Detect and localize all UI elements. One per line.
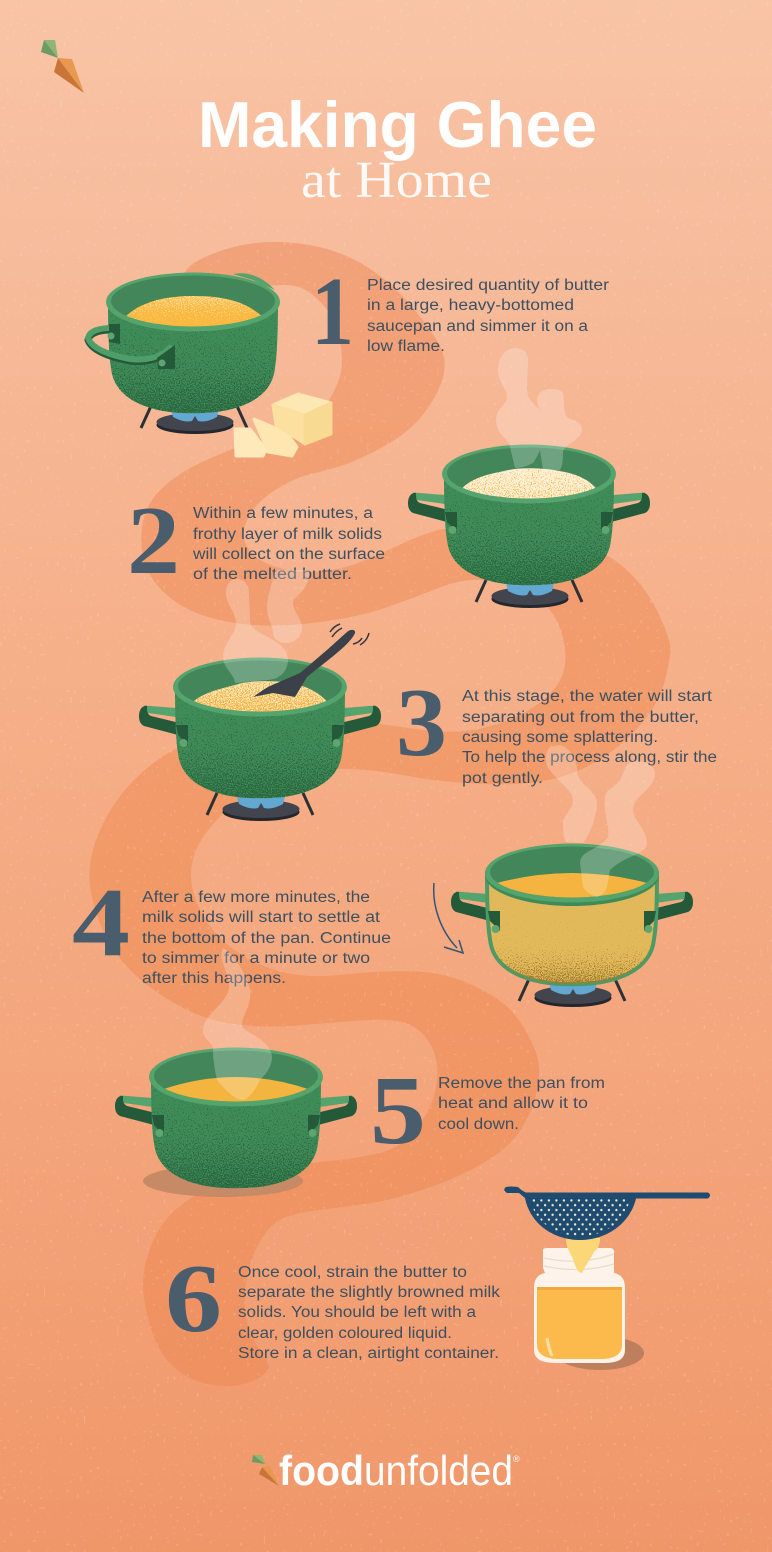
step 5 text: cool down. (438, 1116, 519, 1133)
step 1 text: saucepan and simmer it on a (367, 318, 588, 335)
frothy milk solids (462, 468, 596, 498)
step 4 text: the bottom of the pan. Continue (142, 930, 391, 947)
step 1 text (367, 277, 609, 355)
step 6 number: 6 (165, 1245, 222, 1352)
step 1 text: in a large, heavy-bottomed (367, 297, 574, 314)
melting butter in pot 1 (126, 296, 261, 326)
foodunfolded logo: food (279, 1447, 364, 1494)
title (198, 88, 597, 209)
steam over pot 5 (203, 948, 272, 1100)
spoon (253, 624, 369, 697)
title: at Home (301, 152, 492, 209)
step 3 text (462, 688, 717, 787)
step 6 text (238, 1264, 500, 1362)
step 6 text: Store in a clean, airtight container. (238, 1345, 499, 1362)
pot 5 off the heat (115, 1048, 357, 1197)
step 6 text: separate the slightly browned milk (238, 1284, 500, 1301)
step 5 text: heat and allow it to (438, 1095, 588, 1112)
jar of ghee (534, 1248, 644, 1370)
front handle of pot 1 (88, 324, 175, 369)
step 2 number: 2 (127, 487, 180, 594)
step 6 text: solids. You should be left with a (238, 1304, 476, 1321)
pot 2 (408, 444, 650, 608)
step 3 text: To help the process along, stir the (462, 749, 717, 766)
jar shadow (556, 1336, 644, 1370)
step 1 number: 1 (311, 258, 354, 365)
cooling butter (164, 1077, 307, 1102)
step 6 text: clear, golden coloured liquid. (238, 1325, 452, 1342)
step 6 text: Once cool, strain the butter to (238, 1264, 467, 1281)
step 3 text: separating out from the butter, (462, 709, 699, 726)
step 2 text: will collect on the surface (192, 546, 385, 563)
winding ribbon path (89, 242, 671, 1386)
pot shadow (143, 1165, 303, 1197)
step 4 text: milk solids will start to settle at (142, 909, 381, 926)
pot 4 with settled milk solids (451, 844, 693, 1007)
step 3 text: At this stage, the water will start (462, 688, 713, 705)
milk solids being stirred (194, 681, 326, 712)
step 1 text: low flame. (367, 338, 445, 355)
steam over pot 4 (546, 745, 655, 897)
pot 1 with butter (88, 272, 280, 434)
dripping ghee (566, 1238, 600, 1273)
step 2 text: frothy layer of milk solids (193, 526, 382, 543)
step 4 text: after this happens. (142, 970, 286, 987)
butter pieces (235, 394, 331, 456)
step 5 number: 5 (370, 1057, 426, 1164)
step 1 text: Place desired quantity of butter (367, 277, 609, 294)
title: Making Ghee (198, 88, 597, 161)
carrot icon (41, 40, 84, 93)
step 4 text: to simmer for a minute or two (142, 950, 370, 967)
step 2 text: Within a few minutes, a (193, 505, 373, 522)
step 3 number: 3 (396, 669, 447, 776)
step 3 text: causing some splattering. (462, 729, 658, 746)
step 2 text (192, 505, 385, 583)
steam over pot 3 (223, 570, 310, 683)
step 5 text (438, 1075, 605, 1133)
step 3 text: pot gently. (462, 770, 543, 787)
step 4 text: After a few more minutes, the (142, 889, 370, 906)
step 5 text: Remove the pan from (438, 1075, 605, 1092)
foodunfolded logo: ® (513, 1454, 520, 1464)
arrow: solids settling (434, 883, 463, 953)
foodunfolded logo (252, 1447, 520, 1494)
foodunfolded logo: unfolded (364, 1447, 513, 1494)
step 2 text: of the melted butter. (193, 566, 352, 583)
steam over pot 2 (496, 348, 582, 470)
step 4 text (142, 889, 391, 987)
liquid butter in pot 4 (498, 873, 646, 898)
pot 3 (139, 658, 381, 821)
strainer (504, 1186, 710, 1240)
step 4 number: 4 (72, 869, 130, 976)
